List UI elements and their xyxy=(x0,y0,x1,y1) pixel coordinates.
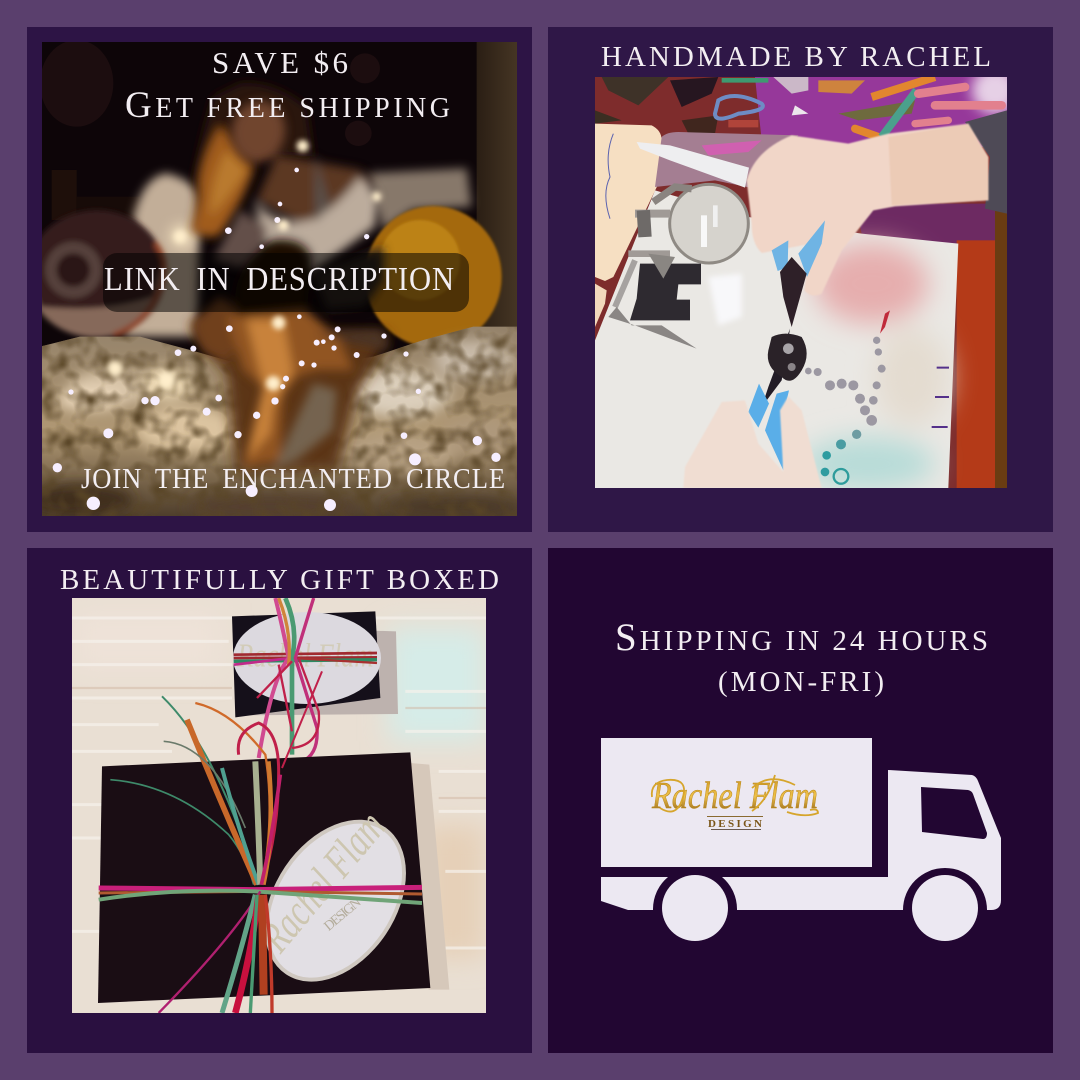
hair xyxy=(190,83,313,237)
heading: save $6: SAVE $6 xyxy=(212,45,348,80)
blanket xyxy=(40,327,520,520)
photo: girl with fairy lights xyxy=(27,40,520,520)
photo: jewellery making hands xyxy=(595,67,1018,490)
yellow round cushion xyxy=(365,206,502,347)
upper hand and sleeve xyxy=(965,110,1007,214)
panel: save $6 promotion xyxy=(27,27,532,532)
large gift box: Rachel Flam xyxy=(249,801,395,962)
text: link in description: LINK IN DESCRIPTION xyxy=(104,261,455,298)
text: join the enchanted circle: JOIN THE ENCHANTED CIRCLE xyxy=(81,463,506,495)
workbench clutter xyxy=(595,77,1002,139)
heading: get free shipping: GET FREE SHIPPING xyxy=(125,85,450,126)
heading: shipping in 24 hours: SHIPPING IN 24 HOURS xyxy=(615,616,988,659)
box shadows xyxy=(245,631,398,715)
white work surface xyxy=(595,190,958,488)
text: mon-fri: (MON-FRI) xyxy=(718,666,884,698)
clear box and glue tube xyxy=(655,132,798,189)
magnifier xyxy=(670,184,748,263)
helping hands stand xyxy=(608,187,701,349)
panel: handmade by rachel xyxy=(548,27,1053,532)
heading: beautifully gift boxed: BEAUTIFULLY GIFT BOXED xyxy=(60,564,499,596)
panel: shipping in 24 hours xyxy=(548,548,1053,1053)
pliers xyxy=(748,220,825,470)
large gift box: DESIGN xyxy=(322,895,364,934)
lower hand xyxy=(683,396,822,488)
arms and legs xyxy=(190,327,390,470)
small gift box xyxy=(232,598,381,761)
bead chain xyxy=(805,337,886,476)
face and torso xyxy=(213,96,378,273)
logo: rachel flam design: DESIGN xyxy=(708,818,762,830)
fairy lights xyxy=(53,168,501,511)
logo: rachel flam design: Rachel Flam xyxy=(651,775,818,817)
beige tray xyxy=(595,124,662,281)
panel: beautifully gift boxed xyxy=(27,548,532,1053)
girl figure xyxy=(190,83,390,470)
heading: handmade by rachel: HANDMADE BY RACHEL xyxy=(601,41,991,73)
logo: rachel flam design xyxy=(651,775,818,830)
left round cushion xyxy=(28,210,165,338)
icon: delivery truck xyxy=(601,738,1001,941)
small gift box: Rachel Flam xyxy=(236,637,374,674)
link in description band xyxy=(103,253,469,312)
photo: gift boxes with ribbon xyxy=(72,598,487,1013)
large gift box xyxy=(98,671,435,1013)
ribbon bundle xyxy=(99,887,422,890)
